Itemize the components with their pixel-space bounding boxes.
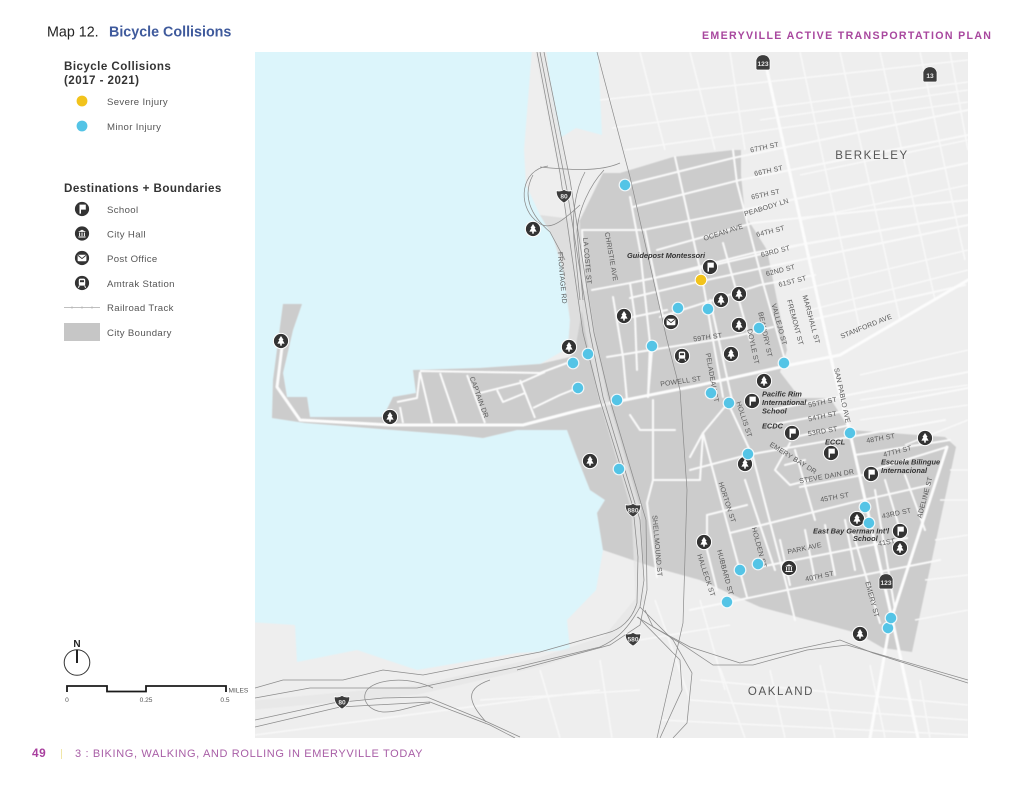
legend item: school: School <box>107 205 138 216</box>
street labels: CHRISTIE AVE <box>603 232 618 282</box>
shield I-580 <box>625 632 641 646</box>
school name labels: Pacific Rim <box>762 390 802 398</box>
legend item: city hall: City Hall <box>107 230 146 240</box>
street labels: MARSHALL ST <box>801 295 820 345</box>
legend item: city boundary <box>64 323 172 341</box>
plan name header: EMERYVILLE ACTIVE TRANSPORTATION PLAN <box>702 30 992 42</box>
shield I-580: 580 <box>627 636 639 644</box>
legend item: railroad track: Railroad Track <box>107 303 174 314</box>
street labels: LA COSTE ST <box>581 237 592 285</box>
street labels: 43RD ST <box>881 507 913 521</box>
school icons <box>702 259 908 539</box>
bay water <box>250 48 605 670</box>
shield 13: 13 <box>926 73 934 80</box>
city street network <box>582 110 968 623</box>
street labels: 65TH ST <box>751 188 781 201</box>
marina roads <box>397 363 580 423</box>
street labels: 55TH ST <box>808 396 838 409</box>
street labels: 62ND ST <box>765 264 797 278</box>
footer: 49 <box>32 746 46 760</box>
north arrow <box>64 639 90 675</box>
school name labels: ECDC <box>762 422 784 430</box>
street labels: BEAUDRY ST <box>756 311 773 358</box>
icon: post office <box>663 314 679 330</box>
street labels: 40TH ST <box>805 570 835 583</box>
surrounding street grid <box>334 53 967 736</box>
shield 123 south: 123 <box>880 580 892 587</box>
school name labels: ECCL <box>825 438 846 446</box>
street labels: 66TH ST <box>754 165 784 178</box>
minor injury collision points <box>567 179 897 634</box>
school name labels: Internacional <box>881 466 928 475</box>
street labels: HOLDEN ST <box>750 527 767 569</box>
panel: legend <box>64 60 222 341</box>
freeway shoulder land <box>540 215 582 350</box>
shield I-880: 880 <box>627 508 639 514</box>
street labels: FREMONT ST <box>785 299 804 347</box>
shield I-80 south <box>334 696 350 709</box>
street labels: SAN PABLO AVE <box>832 367 851 424</box>
freeway right of way <box>550 86 642 651</box>
scale bar: MILES <box>228 688 249 694</box>
map panel <box>250 48 972 742</box>
scale bar: 0.5 <box>220 697 230 704</box>
freeways and ramps <box>255 52 968 738</box>
base map layers <box>250 48 972 742</box>
shield I-80 south: 80 <box>338 700 346 706</box>
street labels: PARK AVE <box>787 542 823 556</box>
legend heading: collisions: (2017 - 2021) <box>64 74 139 87</box>
school name labels: International <box>762 398 807 407</box>
legend item: city hall <box>74 226 146 241</box>
city label: berkeley: BERKELEY <box>835 150 909 162</box>
street labels: CAPTAIN DR <box>468 376 489 419</box>
street labels: 54TH ST <box>808 410 838 423</box>
legend item: city boundary: City Boundary <box>107 328 172 339</box>
street labels: EMERY ST <box>863 581 880 619</box>
street labels: STANFORD AVE <box>840 314 893 341</box>
legend item: minor injury <box>77 121 161 133</box>
icon: amtrak station <box>674 348 690 364</box>
shield I-880 <box>625 504 641 517</box>
shield 13 <box>923 67 937 82</box>
railroad track <box>597 52 687 738</box>
street labels: DOYLE ST <box>745 328 760 365</box>
street labels: 41ST <box>878 538 896 548</box>
legend item: post office: Post Office <box>107 254 158 265</box>
school name labels: East Bay German Int'l <box>813 526 890 536</box>
legend item: post office <box>74 250 158 266</box>
north arrow: N <box>73 639 81 650</box>
street labels: SHELLMOUND ST <box>650 515 663 577</box>
legend heading: collisions: Bicycle Collisions <box>64 60 171 73</box>
street labels: HUBBARD ST <box>715 549 734 597</box>
footer: 3 : BIKING, WALKING, AND ROLLING IN EMERYVILLE TODAY <box>75 748 423 760</box>
street labels <box>468 141 935 619</box>
street labels: EMERY BAY DR <box>768 442 817 476</box>
street labels: 61ST ST <box>778 275 808 289</box>
freeway lines <box>255 52 968 738</box>
map title: Map 12. <box>47 24 99 40</box>
shield I-80 north <box>556 190 572 203</box>
land background <box>250 48 972 742</box>
major arterials <box>277 70 968 738</box>
icon: city hall <box>781 560 797 576</box>
school name labels: Guidepost Montessori <box>627 251 706 260</box>
street labels: HORTON ST <box>717 481 736 524</box>
school name labels <box>627 251 940 543</box>
highway shields <box>334 55 937 709</box>
map title <box>47 24 231 40</box>
street labels: POWELL ST <box>660 376 702 388</box>
legend heading: collisions <box>64 60 171 87</box>
street labels: VALLEJO ST <box>770 303 787 347</box>
scale bar <box>65 686 249 704</box>
street labels: 48TH ST <box>866 433 896 445</box>
legend item: railroad track <box>64 303 174 314</box>
upper bay inlet <box>546 48 602 138</box>
scale bar: 0.25 <box>140 697 153 704</box>
map title: Bicycle Collisions <box>109 24 231 40</box>
legend item: severe injury: Severe Injury <box>107 97 168 108</box>
street labels: OCEAN AVE <box>703 223 744 243</box>
street labels: STEVE DAIN DR <box>799 469 855 485</box>
street labels: 59TH ST <box>693 332 723 344</box>
street labels: ADELINE ST <box>917 476 935 519</box>
legend item: school <box>74 201 138 217</box>
street labels: 63RD ST <box>760 245 792 259</box>
street labels: 64TH ST <box>756 225 786 239</box>
legend item: minor injury: Minor Injury <box>107 122 161 133</box>
legend heading: destinations: Destinations + Boundaries <box>64 182 222 195</box>
street labels: FRONTAGE RD <box>556 252 567 304</box>
street labels: HOLLIS ST <box>734 401 753 439</box>
street labels: 47TH ST <box>883 445 913 459</box>
park icons <box>273 221 933 642</box>
shield 123 north <box>756 55 770 70</box>
severe injury collision point <box>695 274 707 286</box>
street labels: 45TH ST <box>820 492 850 504</box>
street labels: PELADEAU ST <box>704 353 719 403</box>
legend item: amtrak station: Amtrak Station <box>107 279 175 290</box>
shield 123 south <box>879 574 893 589</box>
legend item: severe injury <box>77 96 168 108</box>
street labels: 67TH ST <box>750 141 780 154</box>
legend item: amtrak station <box>74 275 175 291</box>
scale bar: 0 <box>65 697 69 704</box>
shield 123 north: 123 <box>757 61 769 68</box>
school name labels: School <box>853 534 879 543</box>
street labels: HALLECK ST <box>695 553 716 598</box>
street labels: PEABODY LN <box>743 198 790 218</box>
school name labels: Escuela Bilingue <box>881 458 940 466</box>
shield I-80 north: 80 <box>560 194 568 200</box>
school name labels: School <box>762 406 788 416</box>
city of emeryville boundary area <box>272 150 956 652</box>
city label: oakland: OAKLAND <box>748 686 814 698</box>
street labels: 53RD ST <box>807 426 839 438</box>
